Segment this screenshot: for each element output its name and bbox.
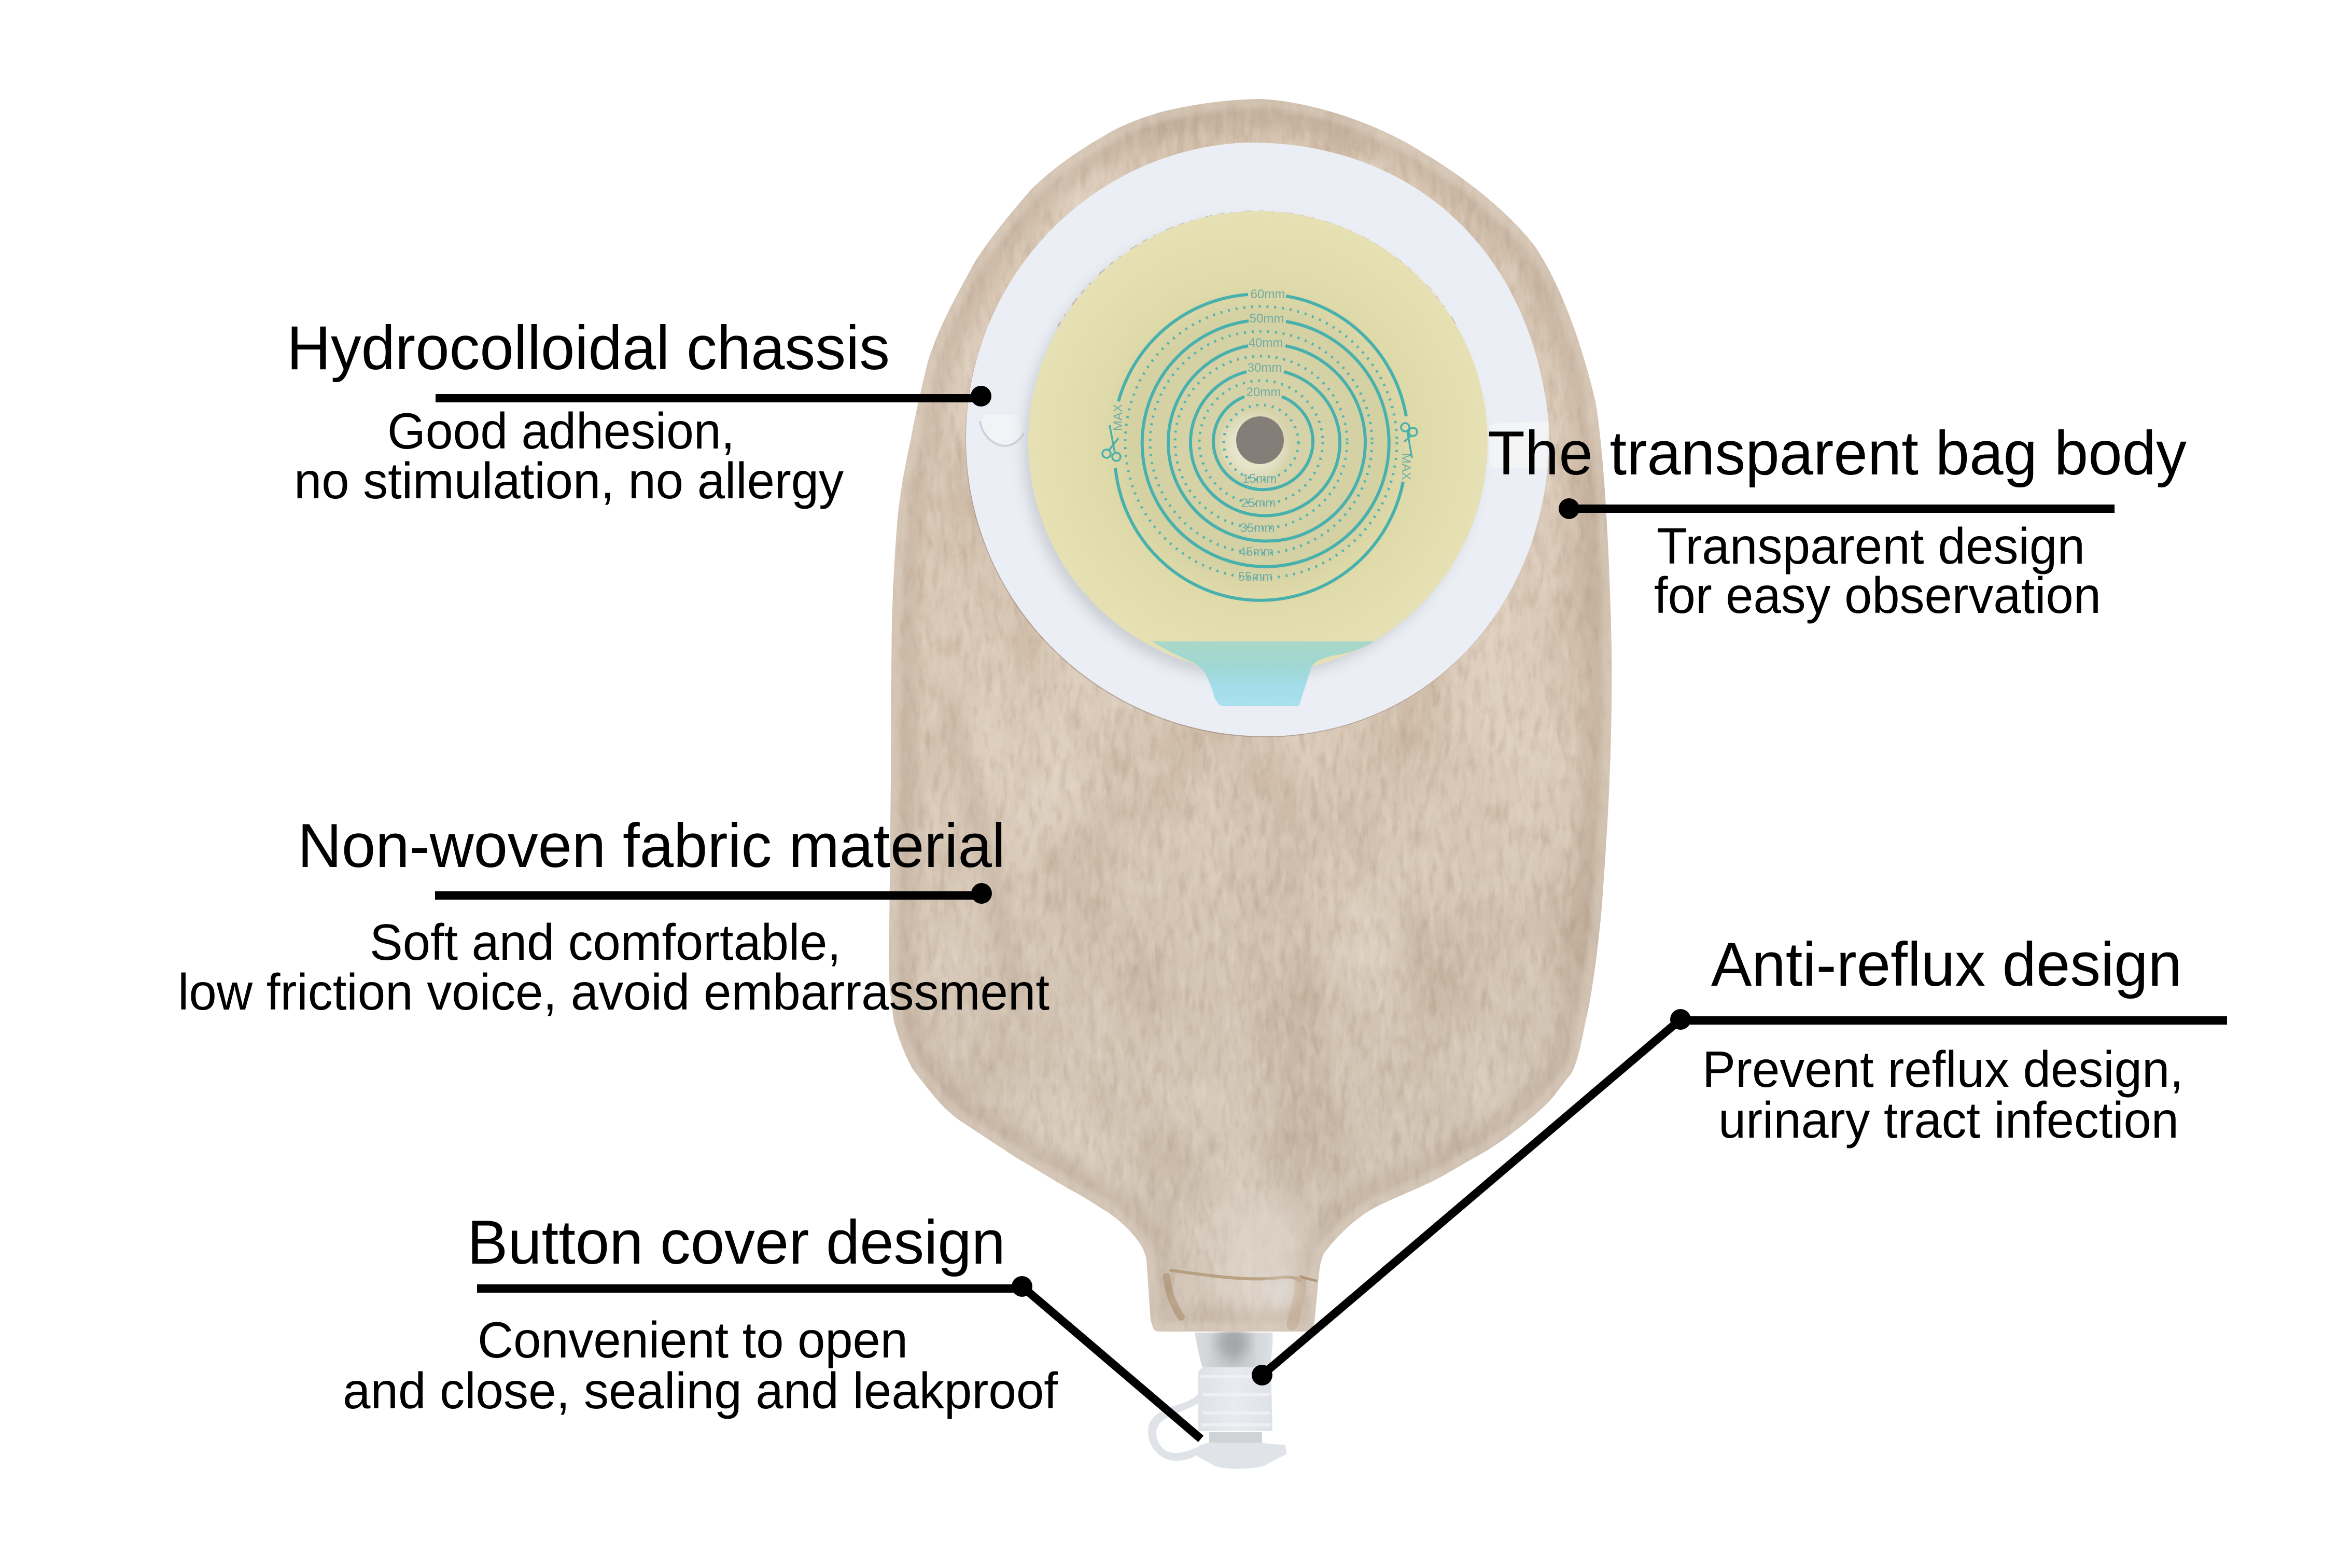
leader line: [436, 386, 991, 407]
description: [1702, 1041, 2183, 1149]
left MAX scissors mark: [1102, 404, 1125, 461]
flange pull tab: [980, 415, 1024, 446]
heading: Non-woven fabric material: [298, 811, 1005, 880]
left MAX scissors mark: MAX: [1111, 404, 1125, 431]
leader line: [477, 1276, 1201, 1439]
button cover seam: [1167, 1270, 1316, 1325]
heading: The transparent bag body: [1488, 418, 2187, 488]
size labels: 45mm: [1239, 545, 1273, 559]
white adhesive flange: [965, 143, 1549, 737]
right MAX scissors mark: [1399, 423, 1417, 480]
size labels: 20mm: [1247, 385, 1281, 399]
heading: Hydrocolloidal chassis: [287, 313, 890, 383]
heading: Anti-reflux design: [1711, 930, 2182, 999]
description: [343, 1311, 1058, 1419]
size labels: 40mm: [1249, 336, 1283, 350]
description: [1654, 517, 2101, 624]
bag body: non-woven fabric: [871, 88, 1628, 1343]
sizing rings: [1115, 295, 1406, 600]
edge seam shading: [889, 99, 1612, 1332]
leader line: [1252, 1009, 2227, 1385]
description: Good adhesion,: [387, 402, 735, 459]
size labels: [1238, 287, 1285, 584]
description: [178, 914, 1049, 1020]
size labels: 55mm: [1238, 570, 1272, 584]
dotted cut guides: [1125, 306, 1397, 578]
description: Soft and comfortable,: [370, 914, 841, 971]
callout: transparent bag body: [1488, 418, 2187, 624]
callout: anti-reflux design: [1252, 930, 2227, 1385]
description: urinary tract infection: [1718, 1091, 2179, 1149]
callout: hydrocolloidal chassis: [287, 313, 991, 509]
blue release tab: [1152, 641, 1375, 706]
description: low friction voice, avoid embarrassment: [178, 963, 1049, 1020]
right MAX scissors mark: MAX: [1399, 453, 1413, 480]
size labels: 60mm: [1251, 287, 1285, 301]
callout: button cover design: [343, 1208, 1201, 1439]
leader line: [1559, 498, 2115, 519]
speckled backing edge: [1058, 212, 1457, 327]
heading: Button cover design: [467, 1208, 1005, 1277]
wafer shadow: [1023, 218, 1480, 680]
description: no stimulation, no allergy: [294, 452, 844, 509]
description: [294, 402, 844, 509]
description: Transparent design: [1657, 517, 2085, 575]
fabric folds: [948, 704, 1019, 1013]
centre stoma hole: [1220, 404, 1296, 481]
callout: non-woven fabric material: [178, 811, 1049, 1020]
description: and close, sealing and leakproof: [343, 1362, 1058, 1419]
hydrocolloid chassis wafer: [1028, 211, 1488, 706]
description: Prevent reflux design,: [1702, 1041, 2183, 1098]
size labels: 15mm: [1242, 472, 1277, 486]
drain valve connector: [1148, 1326, 1286, 1469]
size labels: 35mm: [1240, 521, 1275, 535]
size labels: 30mm: [1248, 361, 1282, 375]
leader line: [435, 883, 992, 904]
description: for easy observation: [1654, 567, 2101, 624]
description: Convenient to open: [478, 1311, 908, 1368]
size labels: 50mm: [1250, 312, 1284, 326]
size labels: 25mm: [1241, 496, 1276, 510]
product photo: ostomy pouch: [871, 88, 1628, 1469]
